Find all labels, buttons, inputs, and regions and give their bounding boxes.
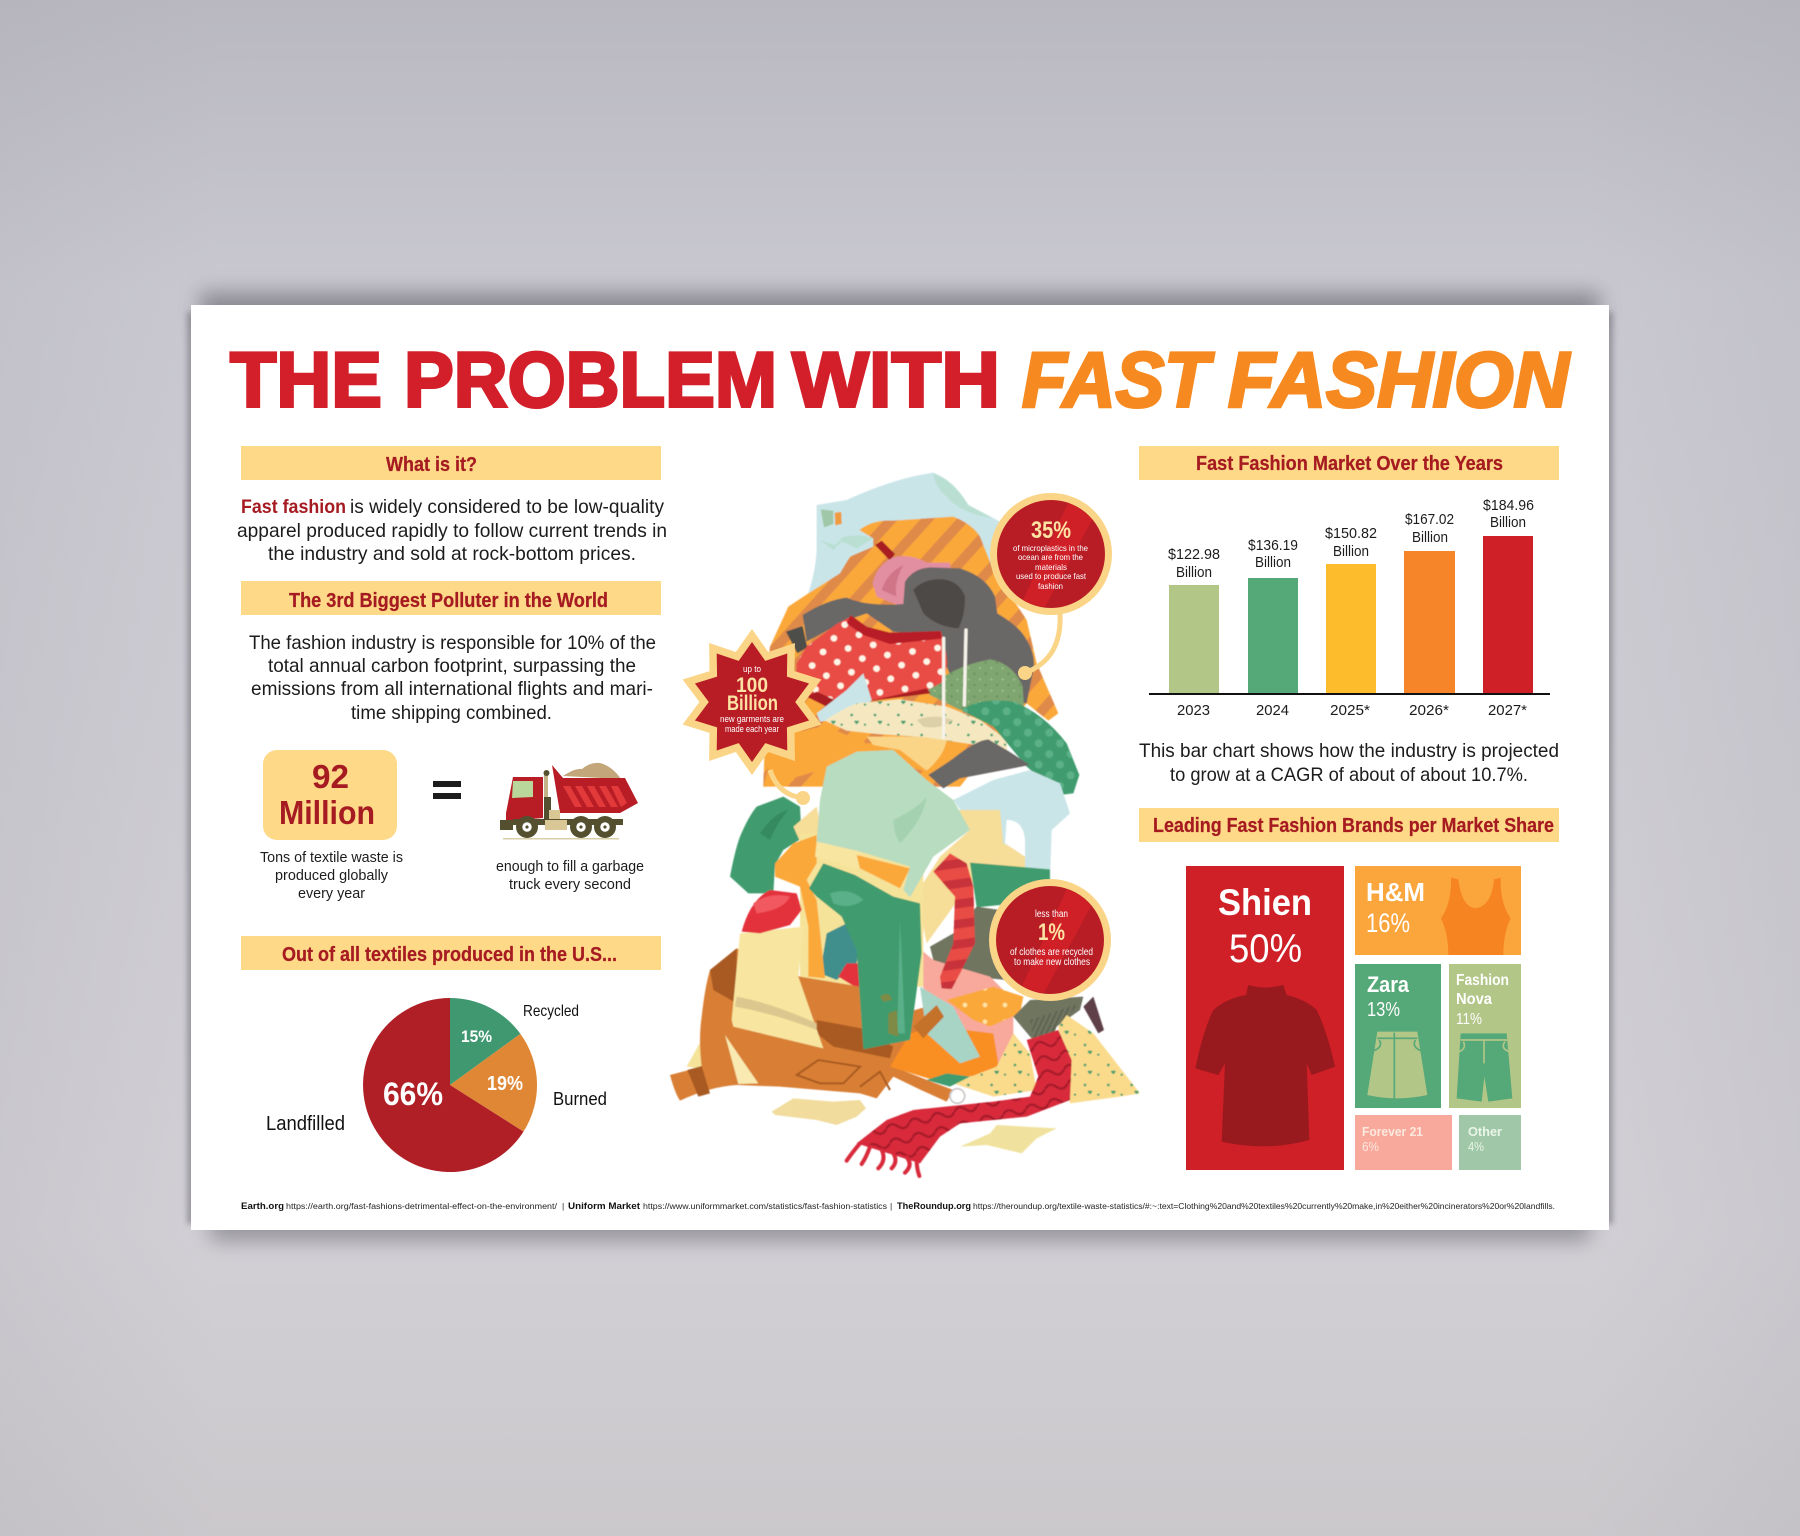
panel: market over the years [1139,446,1564,786]
treemap: Zara: 13% [1367,999,1400,1021]
heading: textiles produced: Out of all textiles produced in the U.S... [282,944,617,966]
treemap: Shien: Shien [1218,882,1312,923]
bar chart: Billion [1490,514,1526,531]
treemap: Other [1459,1115,1521,1170]
title: THE [230,336,382,424]
sources footer [241,1201,1555,1211]
heading: brands: Leading Fast Fashion Brands per Market Share [1153,815,1554,837]
stat: 92 million: Million [279,794,375,831]
bar chart: $184.96 [1483,497,1534,514]
title: PROBLEM [404,336,777,424]
heading: market [1139,446,1559,480]
sources footer: | [890,1201,892,1211]
bar chart [1149,497,1550,719]
caption: garbage truck: truck every second [509,876,631,893]
title [230,336,1571,424]
pie chart [266,998,607,1172]
treemap: Zara: Zara [1367,972,1410,997]
callout: 35 percent microplastics [990,493,1112,680]
callout: 35 percent microplastics: used to produce fast [1016,571,1087,581]
treemap: Fashion Nova: 11% [1456,1011,1482,1028]
icon: equals sign [433,781,461,799]
treemap: Fashion Nova: Fashion [1456,972,1509,989]
lower pile [670,750,1140,1176]
panel: what is it [237,446,672,565]
text block: carbon footprint: time shipping combined. [351,702,552,724]
sources footer: Earth.org [241,1201,284,1211]
bar chart: 2025* [1330,702,1370,719]
callout: less than 1 percent recycled: to make new clothes [1014,957,1090,968]
bar chart: $167.02 [1405,511,1454,528]
callout: less than 1 percent recycled: 1% [1038,919,1065,946]
pie chart: Recycled [523,1003,579,1020]
bar chart: $136.19 [1248,537,1298,554]
pie chart: 15% [461,1027,492,1046]
sources footer: https://www.uniformmarket.com/statistics/fast-fashion-statistics [643,1201,887,1211]
text block: carbon footprint: total annual carbon footprint, surpassing the [268,655,636,677]
callout: 100 billion garments: new garments are [720,714,784,724]
caption: tons of textile waste: produced globally [275,867,388,884]
heading: textiles produced [241,936,661,970]
bar chart: Billion [1412,529,1448,546]
sources footer: https://theroundup.org/textile-waste-statistics/#:~:text=Clothing%20and%20textiles%20currently%20make,in%20either%20incinerators%20or%20landfills. [973,1201,1555,1211]
callout: 100 billion garments [683,629,821,805]
bar chart: Billion [1333,543,1369,560]
callout: 35 percent microplastics: of microplastics in the [1013,543,1088,553]
pie chart: Burned [553,1089,607,1109]
stat: 92 million: 92 [312,758,349,795]
heading: polluter [241,581,661,615]
pie chart: 66% [383,1076,443,1112]
panel: infographic poster [191,305,1609,1230]
icon: garbage truck [500,763,638,840]
text block: carbon footprint: The fashion industry is responsible for 10% of the [249,632,656,654]
treemap: H&M: 16% [1366,908,1410,938]
treemap: Forever 21: 6% [1362,1139,1379,1154]
treemap: Other: 4% [1468,1139,1484,1154]
callout: 100 billion garments: Billion [727,692,778,715]
treemap: Shien: 50% [1229,927,1302,971]
text block: CAGR: to grow at a CAGR of about of about 10.7%. [1170,764,1528,786]
heading: polluter: The 3rd Biggest Polluter in the World [289,590,608,612]
sources footer: | [562,1201,564,1211]
pie chart: 19% [487,1073,523,1095]
treemap: Forever 21: Forever 21 [1362,1124,1423,1139]
heading: what is it: What is it? [386,454,477,476]
callout: 35 percent microplastics: fashion [1038,581,1063,591]
treemap: H&M: H&M [1366,877,1425,907]
upper pile [763,473,1079,795]
title: WITH [792,336,1000,424]
treemap: H&M [1355,866,1521,955]
stat: 92 million [263,750,397,840]
panel: textiles produced [241,936,661,1172]
callout: 35 percent microplastics: materials [1035,562,1067,572]
callout: less than 1 percent recycled [989,879,1111,1001]
bar chart: $122.98 [1168,546,1220,563]
caption: tons of textile waste: every year [298,885,365,902]
text block: carbon footprint: emissions from all international flights and mari- [251,678,653,700]
treemap: Shien [1186,866,1344,1170]
callout: 35 percent microplastics: ocean are from the [1018,552,1083,562]
caption: garbage truck: enough to fill a garbage [496,858,644,875]
pie chart: Landfilled [266,1113,345,1135]
title: FAST [1022,336,1215,424]
panel: third biggest polluter [241,581,661,902]
callout: 100 billion garments: made each year [725,724,779,734]
treemap: Forever 21 [1355,1115,1452,1170]
text block: definition: is widely considered to be low-quality [350,496,664,518]
bar chart: 2026* [1409,702,1449,719]
callout: 100 billion garments: 100 [736,674,768,697]
heading: brands [1139,808,1559,842]
heading: what is it [241,446,661,480]
text block: definition: the industry and sold at rock-bottom prices. [268,543,636,565]
treemap: Zara [1355,964,1441,1108]
callout: 35 percent microplastics: 35% [1031,517,1071,544]
text block: definition: Fast fashion [241,496,346,518]
bar chart: 2027* [1488,702,1527,719]
callout: 100 billion garments: up to [743,664,761,674]
bar chart: 2024 [1256,702,1289,719]
bar chart: Billion [1255,554,1291,571]
sources footer: TheRoundup.org [897,1201,971,1211]
treemap: Other: Other [1468,1124,1502,1139]
bar chart: $150.82 [1325,525,1377,542]
text block: definition: apparel produced rapidly to follow current trends in [237,520,667,542]
heading: market: Fast Fashion Market Over the Years [1196,453,1503,475]
callout: less than 1 percent recycled: less than [1035,909,1068,920]
panel: leading brands [1139,808,1559,1170]
bar chart: Billion [1176,564,1212,581]
caption: tons of textile waste: Tons of textile waste is [260,849,403,866]
treemap: Fashion Nova: Nova [1456,991,1492,1008]
text block: CAGR: This bar chart shows how the industry is projected [1139,740,1559,762]
sources footer: https://earth.org/fast-fashions-detrimental-effect-on-the-environment/ [286,1201,558,1211]
title: FASHION [1228,336,1571,424]
callout: less than 1 percent recycled: of clothes are recycled [1010,947,1093,958]
sources footer: Uniform Market [568,1201,640,1211]
bar chart: 2023 [1177,702,1210,719]
treemap: Fashion Nova [1449,964,1521,1108]
illustration: pile of clothes [670,473,1140,1176]
